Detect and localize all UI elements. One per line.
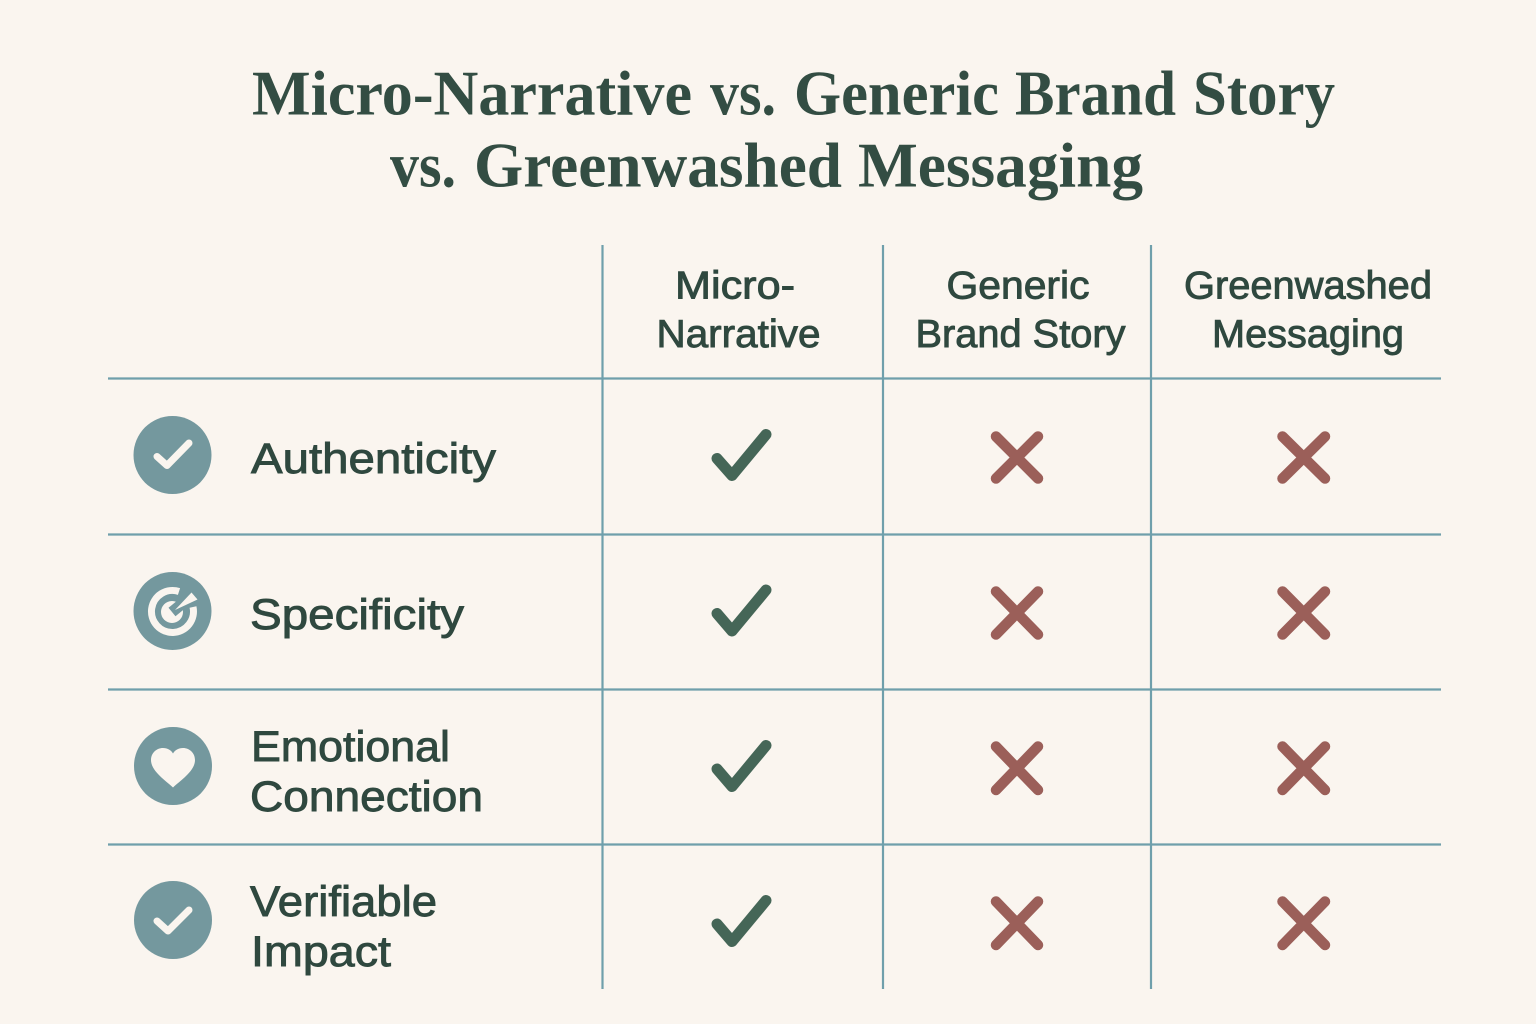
cross: Generic Brand Story	[996, 746, 1038, 790]
title: Micro-Narrative	[252, 58, 692, 128]
row label: Specificity: Specificity	[250, 591, 465, 639]
row label: Verifiable Impact: Impact	[251, 928, 391, 976]
cross: Greenwashed Messaging	[1282, 436, 1325, 478]
row: Emotional Connection	[134, 723, 1325, 821]
cross: Generic Brand Story	[996, 902, 1038, 945]
icon: check badge	[134, 416, 212, 494]
cross: Greenwashed Messaging	[1282, 746, 1325, 790]
title: Brand	[1015, 58, 1176, 128]
column header: Micro-Narrative	[656, 264, 820, 356]
title: vs.	[710, 58, 776, 128]
cross: Generic Brand Story	[996, 436, 1038, 478]
row: Verifiable Impact	[134, 878, 1325, 976]
column header: Greenwashed Messaging: Greenwashed	[1184, 264, 1432, 308]
column header: Greenwashed Messaging: Messaging	[1212, 313, 1404, 356]
title	[252, 58, 1335, 200]
row label: Emotional Connection: Connection	[250, 773, 483, 821]
row: Authenticity	[134, 416, 1325, 494]
row label: Verifiable Impact: Verifiable	[250, 878, 437, 926]
column header: Micro-Narrative: Micro-	[675, 264, 795, 308]
table grid lines	[108, 245, 1441, 989]
cross: Greenwashed Messaging	[1282, 902, 1325, 945]
row label: Authenticity: Authenticity	[251, 435, 497, 483]
check: Micro-Narrative	[717, 900, 766, 942]
title: Story	[1193, 58, 1335, 128]
row label: Emotional Connection: Emotional	[251, 723, 450, 771]
cross: Generic Brand Story	[996, 592, 1038, 634]
column header: Generic Brand Story: Generic	[946, 264, 1090, 308]
check: Micro-Narrative	[717, 590, 766, 631]
row label: Verifiable Impact	[250, 878, 437, 976]
title: Messaging	[858, 130, 1143, 200]
title: Greenwashed	[474, 130, 842, 200]
column header: Generic Brand Story	[916, 264, 1126, 356]
column header: Greenwashed Messaging	[1184, 264, 1432, 356]
check: Micro-Narrative	[717, 434, 766, 476]
title: vs.	[390, 130, 456, 200]
icon: heart	[134, 727, 212, 805]
row label: Emotional Connection	[250, 723, 483, 821]
check: Micro-Narrative	[717, 746, 766, 786]
title: Generic	[794, 58, 999, 128]
column header: Micro-Narrative: Narrative	[656, 313, 820, 356]
row: Specificity	[134, 572, 1325, 650]
icon: check badge	[134, 881, 212, 959]
cross: Greenwashed Messaging	[1282, 592, 1325, 634]
column header: Generic Brand Story: Brand Story	[916, 313, 1126, 356]
icon: target	[134, 572, 212, 650]
